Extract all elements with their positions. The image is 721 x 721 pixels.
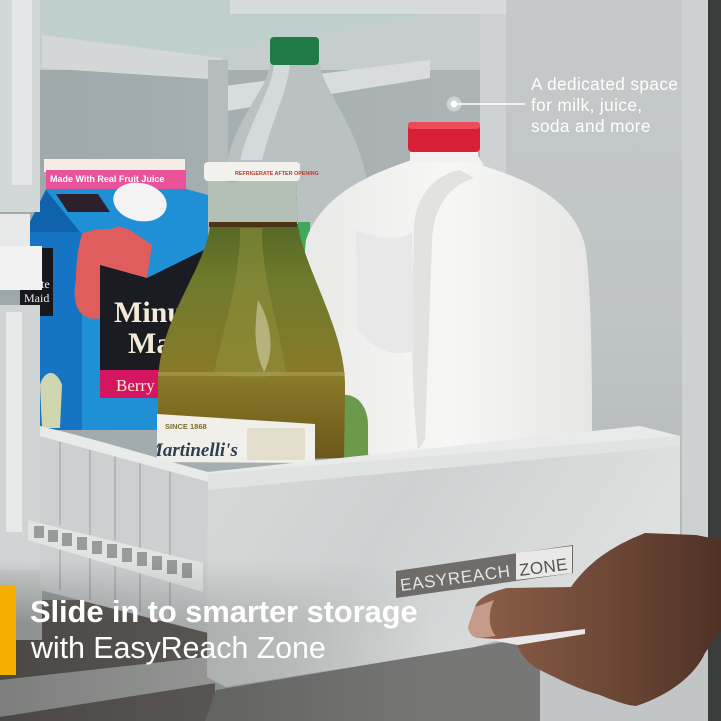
caption heading: Slide in to smarter storage bbox=[30, 594, 418, 629]
glass juice bottle: REFRIGERATE AFTER OPENING bbox=[235, 171, 319, 177]
dark gradient behind caption bbox=[0, 568, 384, 721]
callout leader line with dot bbox=[446, 96, 525, 112]
hand bbox=[468, 533, 721, 706]
callout text: soda and more bbox=[531, 116, 651, 136]
EasyReach Zone badge bbox=[396, 545, 573, 598]
EasyReach Zone badge: EASYREACH bbox=[399, 562, 512, 595]
EasyReach drawer bbox=[28, 426, 680, 687]
callout text: for milk, juice, bbox=[531, 95, 642, 115]
glass juice bottle: SINCE 1868 bbox=[165, 422, 207, 431]
front handle rail with slots bbox=[28, 520, 203, 592]
large clear soda bottle bbox=[226, 37, 368, 260]
juice carton: Berry bbox=[116, 376, 155, 395]
door bin at left bbox=[0, 0, 42, 595]
glass juice bottle: Martinelli's bbox=[145, 440, 238, 461]
yellow accent bar bbox=[0, 585, 16, 675]
glass juice bottle bbox=[145, 162, 368, 463]
below drawer area bbox=[0, 570, 708, 721]
juice carton bbox=[20, 159, 208, 430]
juice carton: Minu bbox=[114, 296, 184, 329]
juice carton: te bbox=[41, 277, 50, 291]
juice carton: Maid bbox=[24, 291, 49, 305]
caption subheading: with EasyReach Zone bbox=[31, 631, 326, 665]
white gallon milk jug bbox=[304, 122, 592, 455]
callout text: A dedicated space bbox=[531, 74, 678, 94]
juice carton: Made With Real Fruit Juice bbox=[50, 174, 164, 184]
juice carton: Ma bbox=[128, 327, 171, 360]
callout text bbox=[531, 74, 678, 136]
EasyReach Zone badge: ZONE bbox=[518, 555, 569, 580]
